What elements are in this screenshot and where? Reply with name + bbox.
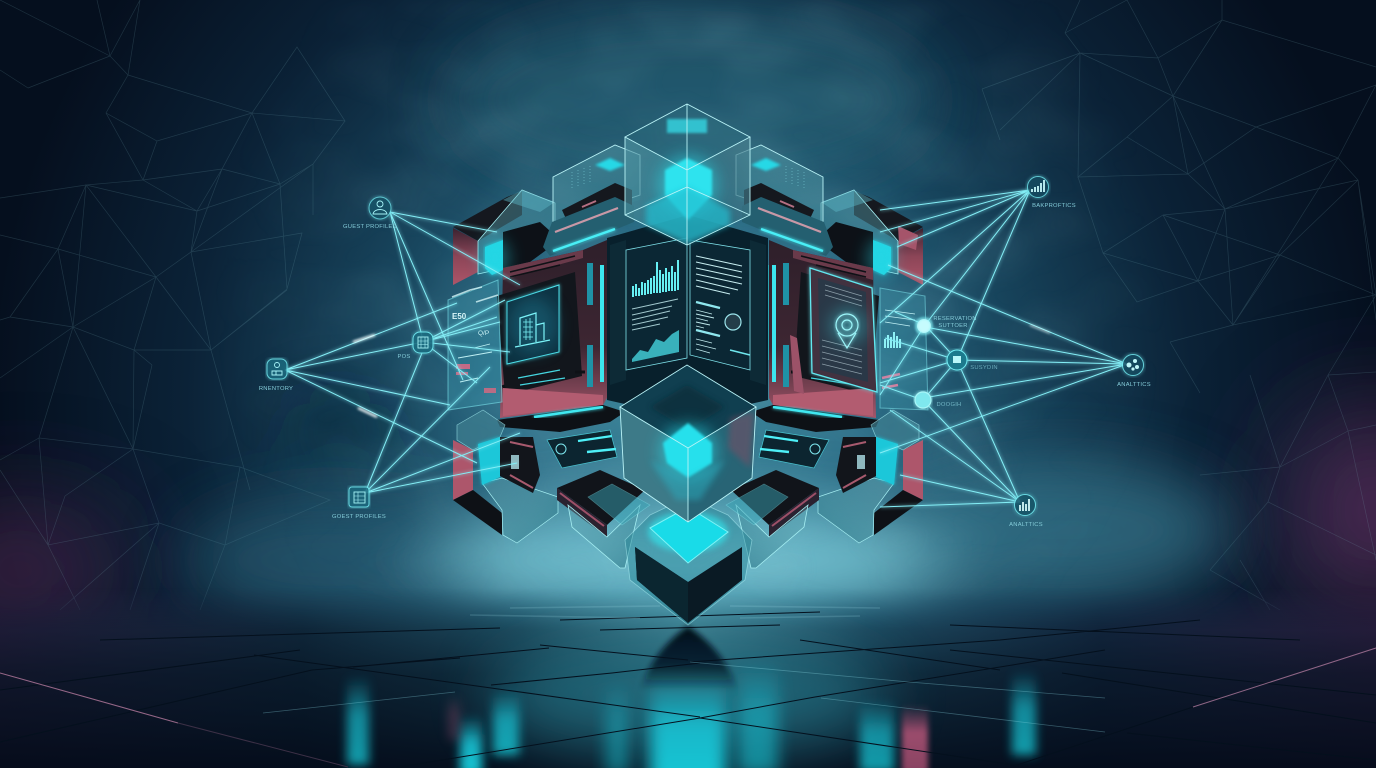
icon: inventory <box>272 362 282 375</box>
network connection lines <box>285 190 1127 507</box>
lower outer block <box>453 410 617 543</box>
icon: analytics bars <box>1020 499 1029 511</box>
upper secondary glass cube <box>543 145 640 256</box>
icon: register <box>354 492 365 503</box>
right holographic panel <box>880 226 928 410</box>
lines from bottom right analytics <box>880 360 1020 507</box>
label: guest profiles: GUEST PROFILED <box>343 224 397 230</box>
floor reflections <box>347 626 1036 768</box>
lines from pos <box>423 300 510 383</box>
label: bottom guest profiles: GOEST PROFILES <box>332 514 386 520</box>
floor highlight lines <box>0 606 1376 767</box>
main panel housing <box>497 240 625 432</box>
floor tile lines <box>0 612 1376 768</box>
fog texture <box>362 5 1066 494</box>
node: analytics bottom <box>1009 494 1043 528</box>
center column <box>607 215 768 418</box>
node: pos <box>398 332 433 360</box>
background polygon mesh right <box>982 0 1376 610</box>
label: inventory: RNENTORY <box>259 386 293 392</box>
area chart <box>632 330 679 362</box>
icon: terminal <box>418 337 428 348</box>
label: analytics right: ANALTTICS <box>1117 382 1151 388</box>
node: guest profiles top <box>343 197 397 230</box>
node: inventory <box>259 359 293 392</box>
label: analytics bottom: ANALTTICS <box>1009 522 1043 528</box>
bottom apex cube <box>625 497 752 625</box>
hologram readout: E50 <box>452 312 467 321</box>
panel screen right <box>790 268 877 394</box>
label: pos: POS <box>398 354 410 360</box>
glow: purple corners <box>0 410 1376 625</box>
label: system: SUSYDIN <box>970 365 998 371</box>
hologram readout: Q/P <box>478 330 489 337</box>
lower secondary block <box>557 470 650 568</box>
label: reservation: RESERVATION <box>933 316 977 322</box>
lines from guest profiles <box>390 212 520 380</box>
icon: building <box>515 313 550 347</box>
floor <box>0 580 1376 768</box>
icon: headset <box>836 314 858 348</box>
lines from bottom guest profiles <box>365 353 520 493</box>
lines among right nodes <box>880 312 957 400</box>
left half of the cube structure <box>453 145 650 568</box>
label: top right: BAKPROFTICS <box>1032 203 1076 209</box>
lines from top right node <box>880 190 1030 360</box>
label: reservation <box>933 316 977 329</box>
icon: growth bars <box>1032 180 1044 192</box>
bottom center glass cube <box>620 365 756 522</box>
node: guest profiles bottom <box>332 487 386 520</box>
label: reservation: SUTTOER <box>938 323 968 329</box>
bar chart <box>633 260 678 297</box>
lines from right analytics <box>880 265 1127 453</box>
left holographic panel <box>448 280 502 410</box>
icon: analytics cluster <box>1126 359 1139 371</box>
node: analytics right <box>1117 354 1151 388</box>
node: lower center right <box>915 392 962 408</box>
lines from inventory <box>285 303 477 463</box>
node: system <box>947 350 998 371</box>
label: lower center right: DOOGIH <box>936 402 962 408</box>
line highlights <box>353 325 1050 417</box>
node: reservation <box>916 316 977 334</box>
book panel: charts <box>626 238 687 370</box>
mirrored right half of the cube structure <box>726 145 923 568</box>
top center glass cube <box>625 104 750 245</box>
icon: person <box>373 201 387 214</box>
background polygon mesh left <box>0 0 345 610</box>
panel screen left <box>507 285 559 364</box>
book panel: text <box>690 240 750 370</box>
fog clouds <box>180 10 1230 620</box>
upper outer block <box>453 190 560 285</box>
node: top right bar profiles <box>1028 176 1076 209</box>
